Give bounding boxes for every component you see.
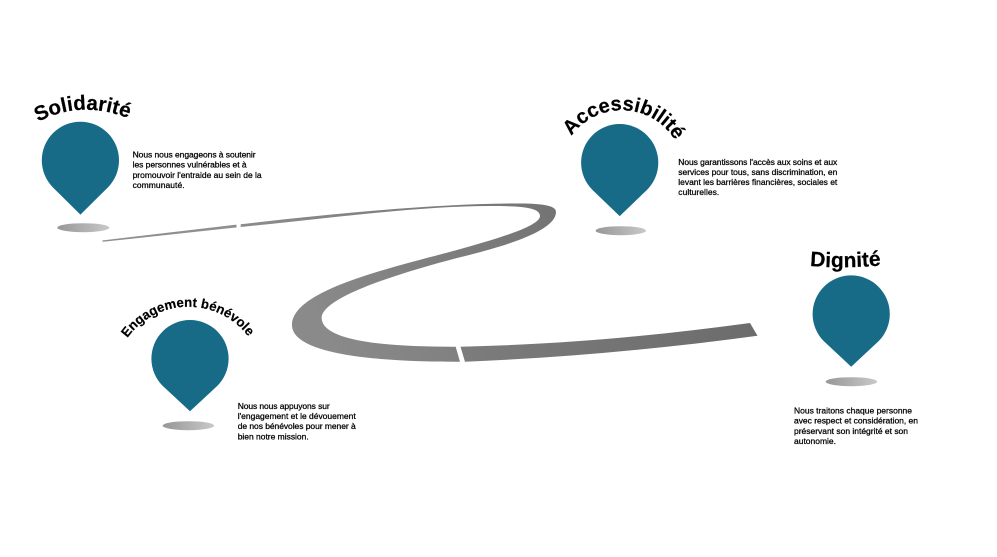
- pin shadow: [596, 226, 646, 235]
- text block: avec respect et considération, en: [794, 415, 918, 425]
- text block: autonomie.: [794, 436, 836, 446]
- road: upper bend and loop: [241, 203, 556, 362]
- text block: culturelles.: [678, 187, 719, 197]
- text block: communauté.: [133, 180, 185, 190]
- text block: Nous nous engageons à soutenir: [133, 150, 256, 160]
- stop: Dignité: [794, 250, 918, 446]
- icon: map pin: [813, 275, 890, 367]
- text block: promouvoir l'entraide au sein de la: [133, 170, 262, 180]
- title: Engagement bénévole: Engagement bénévole: [120, 298, 252, 338]
- text block: [678, 157, 838, 197]
- text block: services pour tous, sans discrimination, en: [678, 167, 838, 177]
- road: final segment: [460, 323, 758, 362]
- text block: bien notre mission.: [238, 432, 309, 442]
- pin shadow: [826, 377, 877, 386]
- text block: [238, 401, 356, 442]
- text block: préservant son intégrité et son: [794, 426, 908, 436]
- winding road: [102, 203, 758, 362]
- text block: [794, 405, 918, 446]
- icon: map pin: [581, 124, 658, 216]
- title: Dignité: Dignité: [811, 250, 880, 272]
- title: Solidarité: Solidarité: [34, 94, 132, 120]
- text block: [133, 150, 262, 190]
- text block: de nos bénévoles pour mener à: [238, 421, 356, 431]
- pin shadow: [163, 421, 214, 430]
- icon: map pin: [42, 122, 119, 215]
- stop: Engagement bénévole: [120, 298, 356, 442]
- stop: Accessibilité: [564, 97, 838, 236]
- text block: Nous garantissons l'accès aux soins et aux: [678, 157, 838, 167]
- icon: map pin: [151, 320, 229, 411]
- text block: Nous traitons chaque personne: [794, 405, 912, 415]
- title: Accessibilité: Accessibilité: [564, 97, 686, 138]
- pin shadow: [57, 223, 109, 232]
- road: thin start segment: [102, 225, 237, 242]
- stop: Solidarité: [34, 94, 262, 232]
- text block: les personnes vulnérables et à: [133, 160, 247, 170]
- text block: l'engagement et le dévouement: [238, 411, 356, 421]
- text block: levant les barrières financières, sociales et: [678, 177, 838, 187]
- text block: Nous nous appuyons sur: [238, 401, 330, 411]
